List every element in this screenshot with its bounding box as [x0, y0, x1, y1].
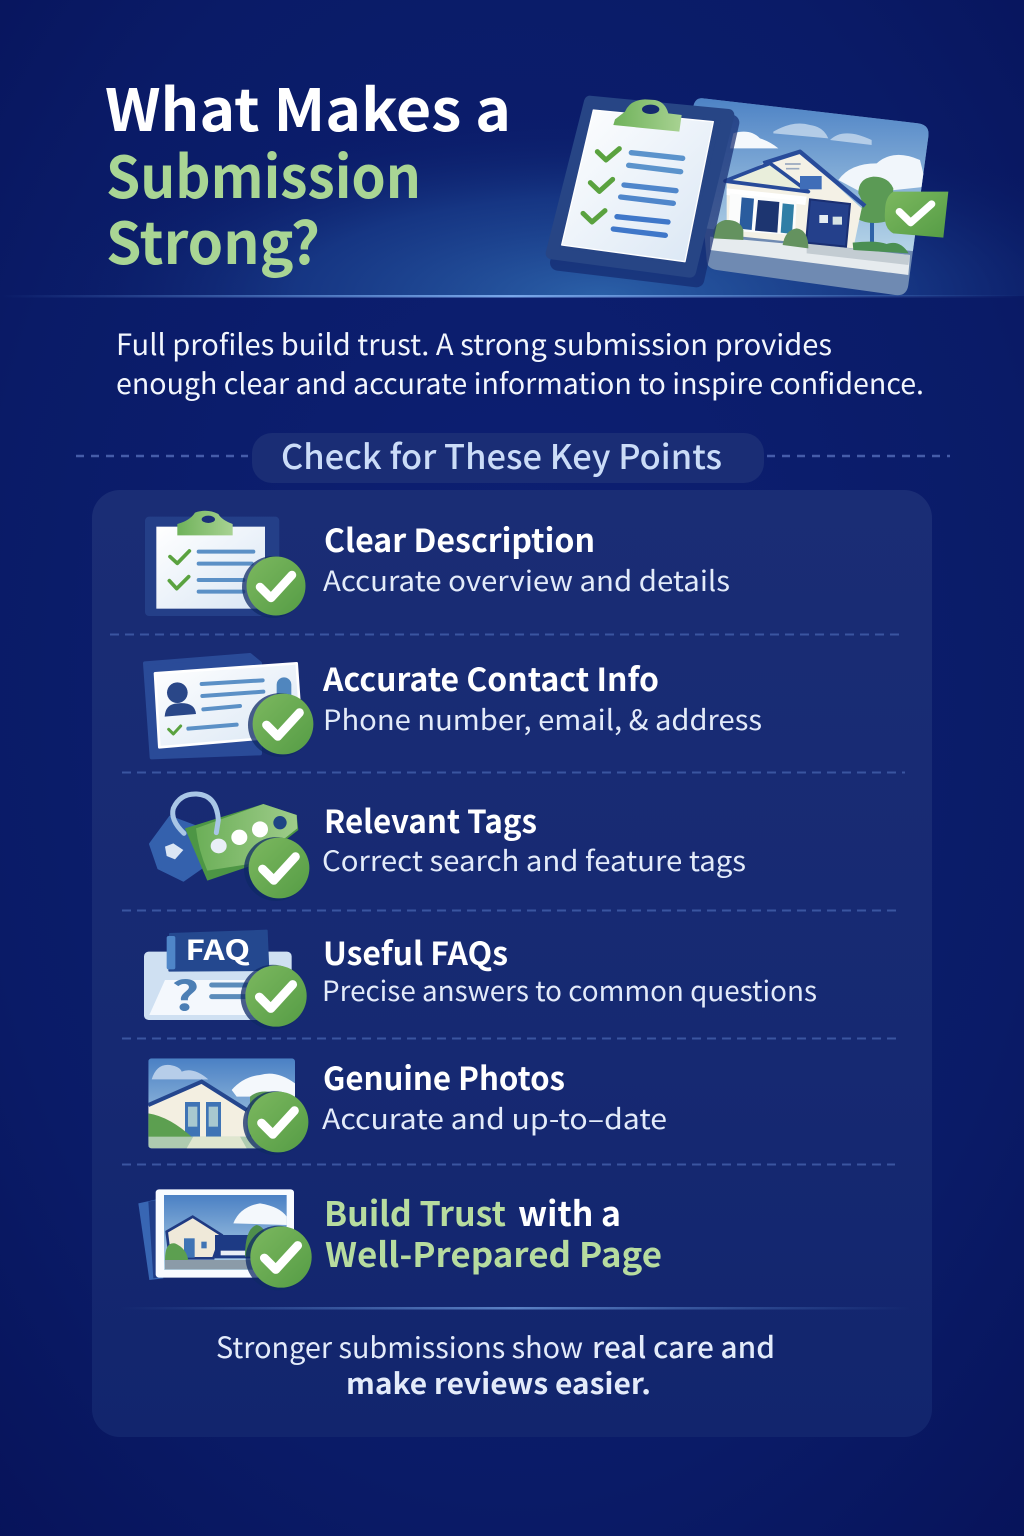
footer text: real care and [592, 1325, 775, 1367]
item: useful FAQs [144, 929, 817, 1029]
panel: key points [92, 490, 932, 1437]
footer text [216, 1325, 775, 1403]
text: build trust [324, 1187, 662, 1277]
text: accurate contact info: Accurate Contact Info [322, 655, 659, 701]
text: accurate contact info: Phone number, email, & address [323, 699, 762, 739]
icon: house photo with check [148, 1058, 308, 1155]
item: relevant tags [150, 794, 746, 901]
text: genuine photos [322, 1054, 667, 1138]
icon: FAQ folder with check: ? [171, 964, 199, 1023]
text: accurate contact info [322, 655, 762, 739]
title: Strong? [106, 197, 320, 281]
intro text: Full profiles build trust. A strong submission provides [116, 322, 832, 364]
icon: FAQ folder with check: FAQ [185, 929, 250, 969]
icon: FAQ folder with check [144, 929, 307, 1029]
footer divider [120, 1307, 910, 1310]
footer text: make reviews easier. [346, 1361, 651, 1403]
icon: clipboard with check [145, 511, 306, 618]
intro text: enough clear and accurate information to inspire confidence. [116, 361, 924, 403]
clipboard [552, 99, 731, 279]
title [105, 64, 511, 281]
header glow [0, 100, 1024, 296]
text: build trust: with a [518, 1187, 621, 1236]
icon: framed photo with check [138, 1189, 312, 1290]
icon: contact card with check [145, 655, 313, 757]
text: relevant tags: Relevant Tags [324, 797, 537, 843]
header divider line [0, 295, 1024, 298]
icon: tags with check [150, 794, 309, 901]
item: build trust [138, 1187, 662, 1290]
item: clear description [145, 511, 730, 618]
text: relevant tags: Correct search and feature tags [322, 840, 746, 880]
item: accurate contact info [145, 655, 762, 757]
text: build trust: Well-Prepared Page [325, 1228, 662, 1277]
section heading: check for these key points: Check for These Key Points [281, 430, 722, 479]
text: useful FAQs: Precise answers to common questions [322, 970, 817, 1010]
text: genuine photos: Accurate and up-to–date [322, 1098, 667, 1138]
text: relevant tags [322, 797, 746, 880]
title: What Makes a [105, 64, 511, 148]
text: clear description: Accurate overview and details [323, 560, 730, 600]
house photo card [690, 93, 948, 300]
intro text [116, 322, 924, 403]
shield check tag [885, 192, 948, 238]
hero illustration: clipboard and house photo [552, 93, 948, 300]
footer text: Stronger submissions show [216, 1325, 583, 1367]
section heading: check for these key points [76, 430, 950, 483]
text: clear description [323, 516, 730, 600]
text: build trust: Build Trust [324, 1187, 506, 1236]
item: genuine photos [148, 1054, 667, 1155]
text: genuine photos: Genuine Photos [323, 1054, 565, 1100]
house [727, 152, 862, 248]
text: clear description: Clear Description [324, 516, 595, 562]
title: Submission [106, 131, 421, 215]
text: useful FAQs: Useful FAQs [323, 929, 508, 975]
text: useful FAQs [322, 929, 817, 1010]
